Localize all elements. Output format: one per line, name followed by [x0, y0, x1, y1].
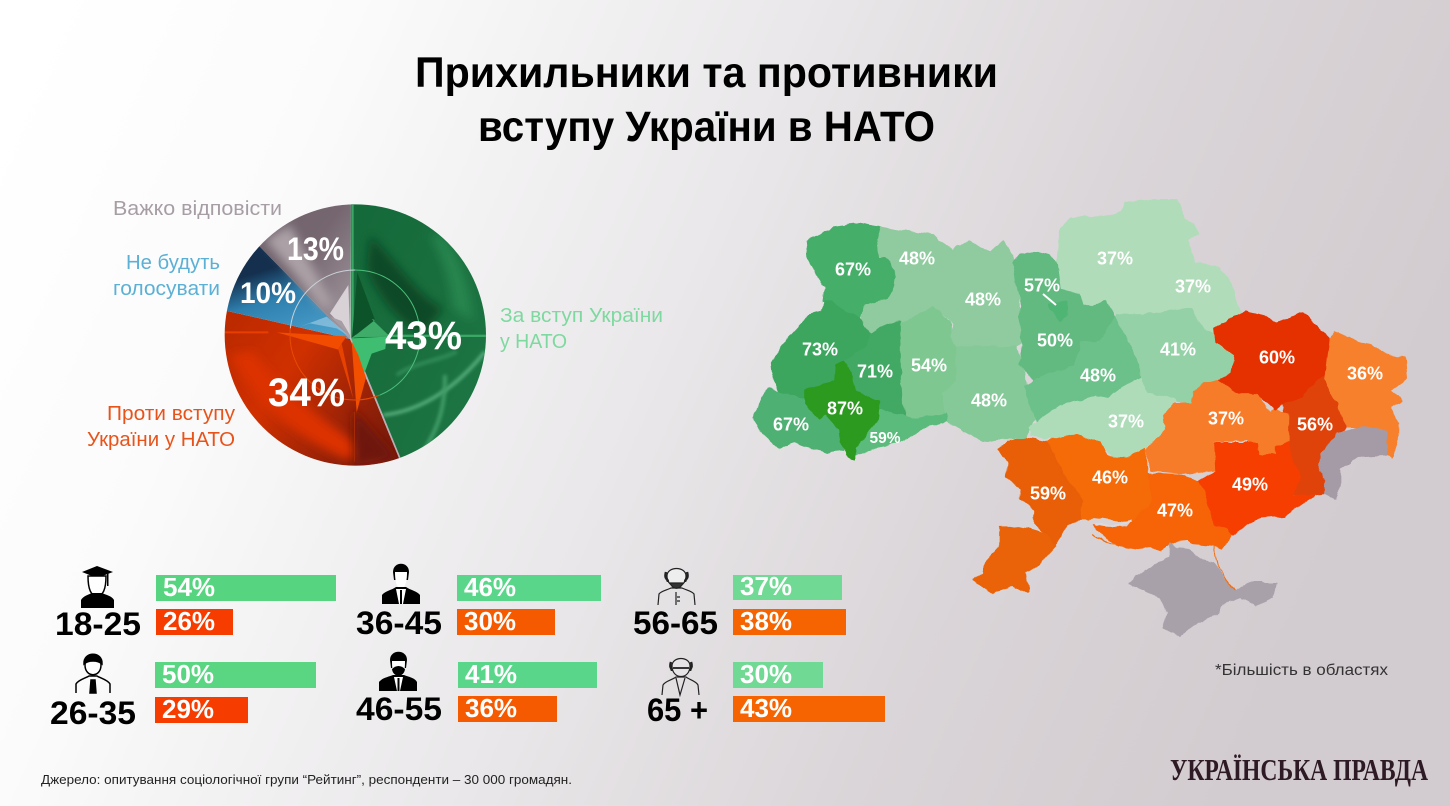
age group 26-35 — [50, 654, 316, 731]
age group 65+ — [647, 658, 885, 728]
map percentages: 60% — [1259, 348, 1295, 368]
bar: for 46% — [457, 575, 601, 601]
map regions — [753, 200, 1407, 635]
map percentages: 49% — [1232, 474, 1268, 494]
map percentages: 57% — [1024, 276, 1060, 296]
bar values: 41% — [465, 659, 517, 689]
Kyiv pointer line — [1043, 294, 1056, 305]
bar values — [464, 572, 516, 636]
bar values — [465, 659, 517, 723]
map percentages: 54% — [911, 356, 947, 376]
age label: 26-35 — [50, 695, 136, 731]
icon: man with beard — [379, 652, 417, 691]
bar values: 38% — [740, 606, 792, 636]
pie percentages: 43% — [385, 314, 462, 358]
age group 18-25 — [55, 566, 336, 642]
icon: young man — [76, 654, 110, 693]
central and eastern regions — [1013, 200, 1407, 495]
map percentages: 48% — [1080, 366, 1116, 386]
age label: 65 + — [647, 692, 708, 728]
icon: elderly man — [662, 658, 699, 695]
age group 36-45 — [356, 564, 601, 641]
bar: against 30% — [457, 609, 555, 635]
age label: 56-65 — [633, 605, 718, 641]
bar values: 37% — [740, 571, 792, 601]
pie legend labels: За вступ України — [500, 305, 663, 327]
map percentages — [773, 248, 1383, 520]
bar values — [163, 572, 215, 636]
title: вступу України в НАТО — [478, 103, 935, 151]
source note: Джерело: опитування соціологічної групи “Рейтинг”, респонденти – 30 000 громадян. — [41, 773, 572, 787]
map percentages: 48% — [899, 248, 935, 268]
bar: against 26% — [156, 609, 233, 635]
map percentages: 67% — [773, 414, 809, 434]
map percentages: 71% — [857, 362, 893, 382]
pie slices with NATO emblem — [224, 204, 486, 466]
age label: 36-45 — [356, 605, 442, 641]
bar values: 46% — [464, 572, 516, 602]
map percentages: 73% — [802, 340, 838, 360]
map percentages: 56% — [1297, 414, 1333, 434]
pie percentages: 13% — [287, 231, 344, 267]
map percentages: 41% — [1160, 340, 1196, 360]
map percentages: 48% — [971, 390, 1007, 410]
bar values — [740, 659, 792, 723]
map percentages: 37% — [1175, 276, 1211, 296]
map percentages: 48% — [965, 290, 1001, 310]
icon: man in suit — [382, 564, 420, 604]
southern regions and Crimea — [973, 427, 1387, 635]
title — [415, 49, 998, 151]
bar values: 50% — [162, 659, 214, 689]
pie legend labels: України у НАТО — [87, 429, 235, 451]
map percentages: 50% — [1037, 330, 1073, 350]
age label: 46-55 — [356, 691, 442, 727]
pie legend labels: у НАТО — [500, 331, 567, 353]
bar values: 26% — [163, 606, 215, 636]
age group 46-55 — [356, 652, 597, 727]
pie chart — [224, 204, 486, 466]
age label: 18-25 — [55, 606, 141, 642]
bar: for 41% — [458, 662, 597, 688]
pie legend labels — [87, 198, 663, 451]
bar: against 38% — [733, 609, 846, 635]
bar: against 43% — [733, 696, 885, 722]
map percentages: 67% — [835, 260, 871, 280]
title: Прихильники та противники — [415, 49, 998, 97]
bar values: 30% — [740, 659, 792, 689]
pie legend labels: Проти вступу — [107, 403, 235, 425]
bar: against 29% — [155, 697, 248, 723]
map percentages: 47% — [1157, 500, 1193, 520]
bar values: 54% — [163, 572, 215, 602]
bar: for 54% — [156, 575, 336, 601]
bar values: 36% — [465, 693, 517, 723]
map percentages: 59% — [1030, 484, 1066, 504]
icon: graduate — [81, 566, 114, 608]
map percentages: 59% — [869, 430, 901, 447]
bar: for 30% — [733, 662, 823, 688]
bar: against 36% — [458, 696, 557, 722]
map percentages: 87% — [827, 398, 863, 418]
bar values — [740, 571, 792, 636]
map percentages: 37% — [1208, 408, 1244, 428]
pie legend labels: голосувати — [113, 278, 220, 300]
map percentages: 36% — [1347, 364, 1383, 384]
bar values: 29% — [162, 694, 214, 724]
icon: older man with beard — [658, 568, 695, 605]
bar values: 43% — [740, 693, 792, 723]
map of Ukraine — [753, 200, 1407, 635]
map percentages: 37% — [1097, 248, 1133, 268]
bar values — [162, 659, 214, 724]
map footnote: *Більшість в областях — [1215, 662, 1388, 679]
bar: for 37% — [733, 575, 842, 600]
pie legend labels: Важко відповісти — [113, 198, 282, 220]
map percentages: 46% — [1092, 468, 1128, 488]
western and central regions — [753, 223, 1037, 461]
pie legend labels: Не будуть — [126, 252, 220, 274]
pie percentages: 10% — [240, 277, 296, 310]
map percentages: 37% — [1108, 412, 1144, 432]
pie percentages: 34% — [268, 371, 345, 415]
pie percentages — [240, 231, 462, 415]
bar: for 50% — [155, 662, 316, 688]
age group 56-65 — [633, 568, 846, 641]
bar values: 30% — [464, 606, 516, 636]
